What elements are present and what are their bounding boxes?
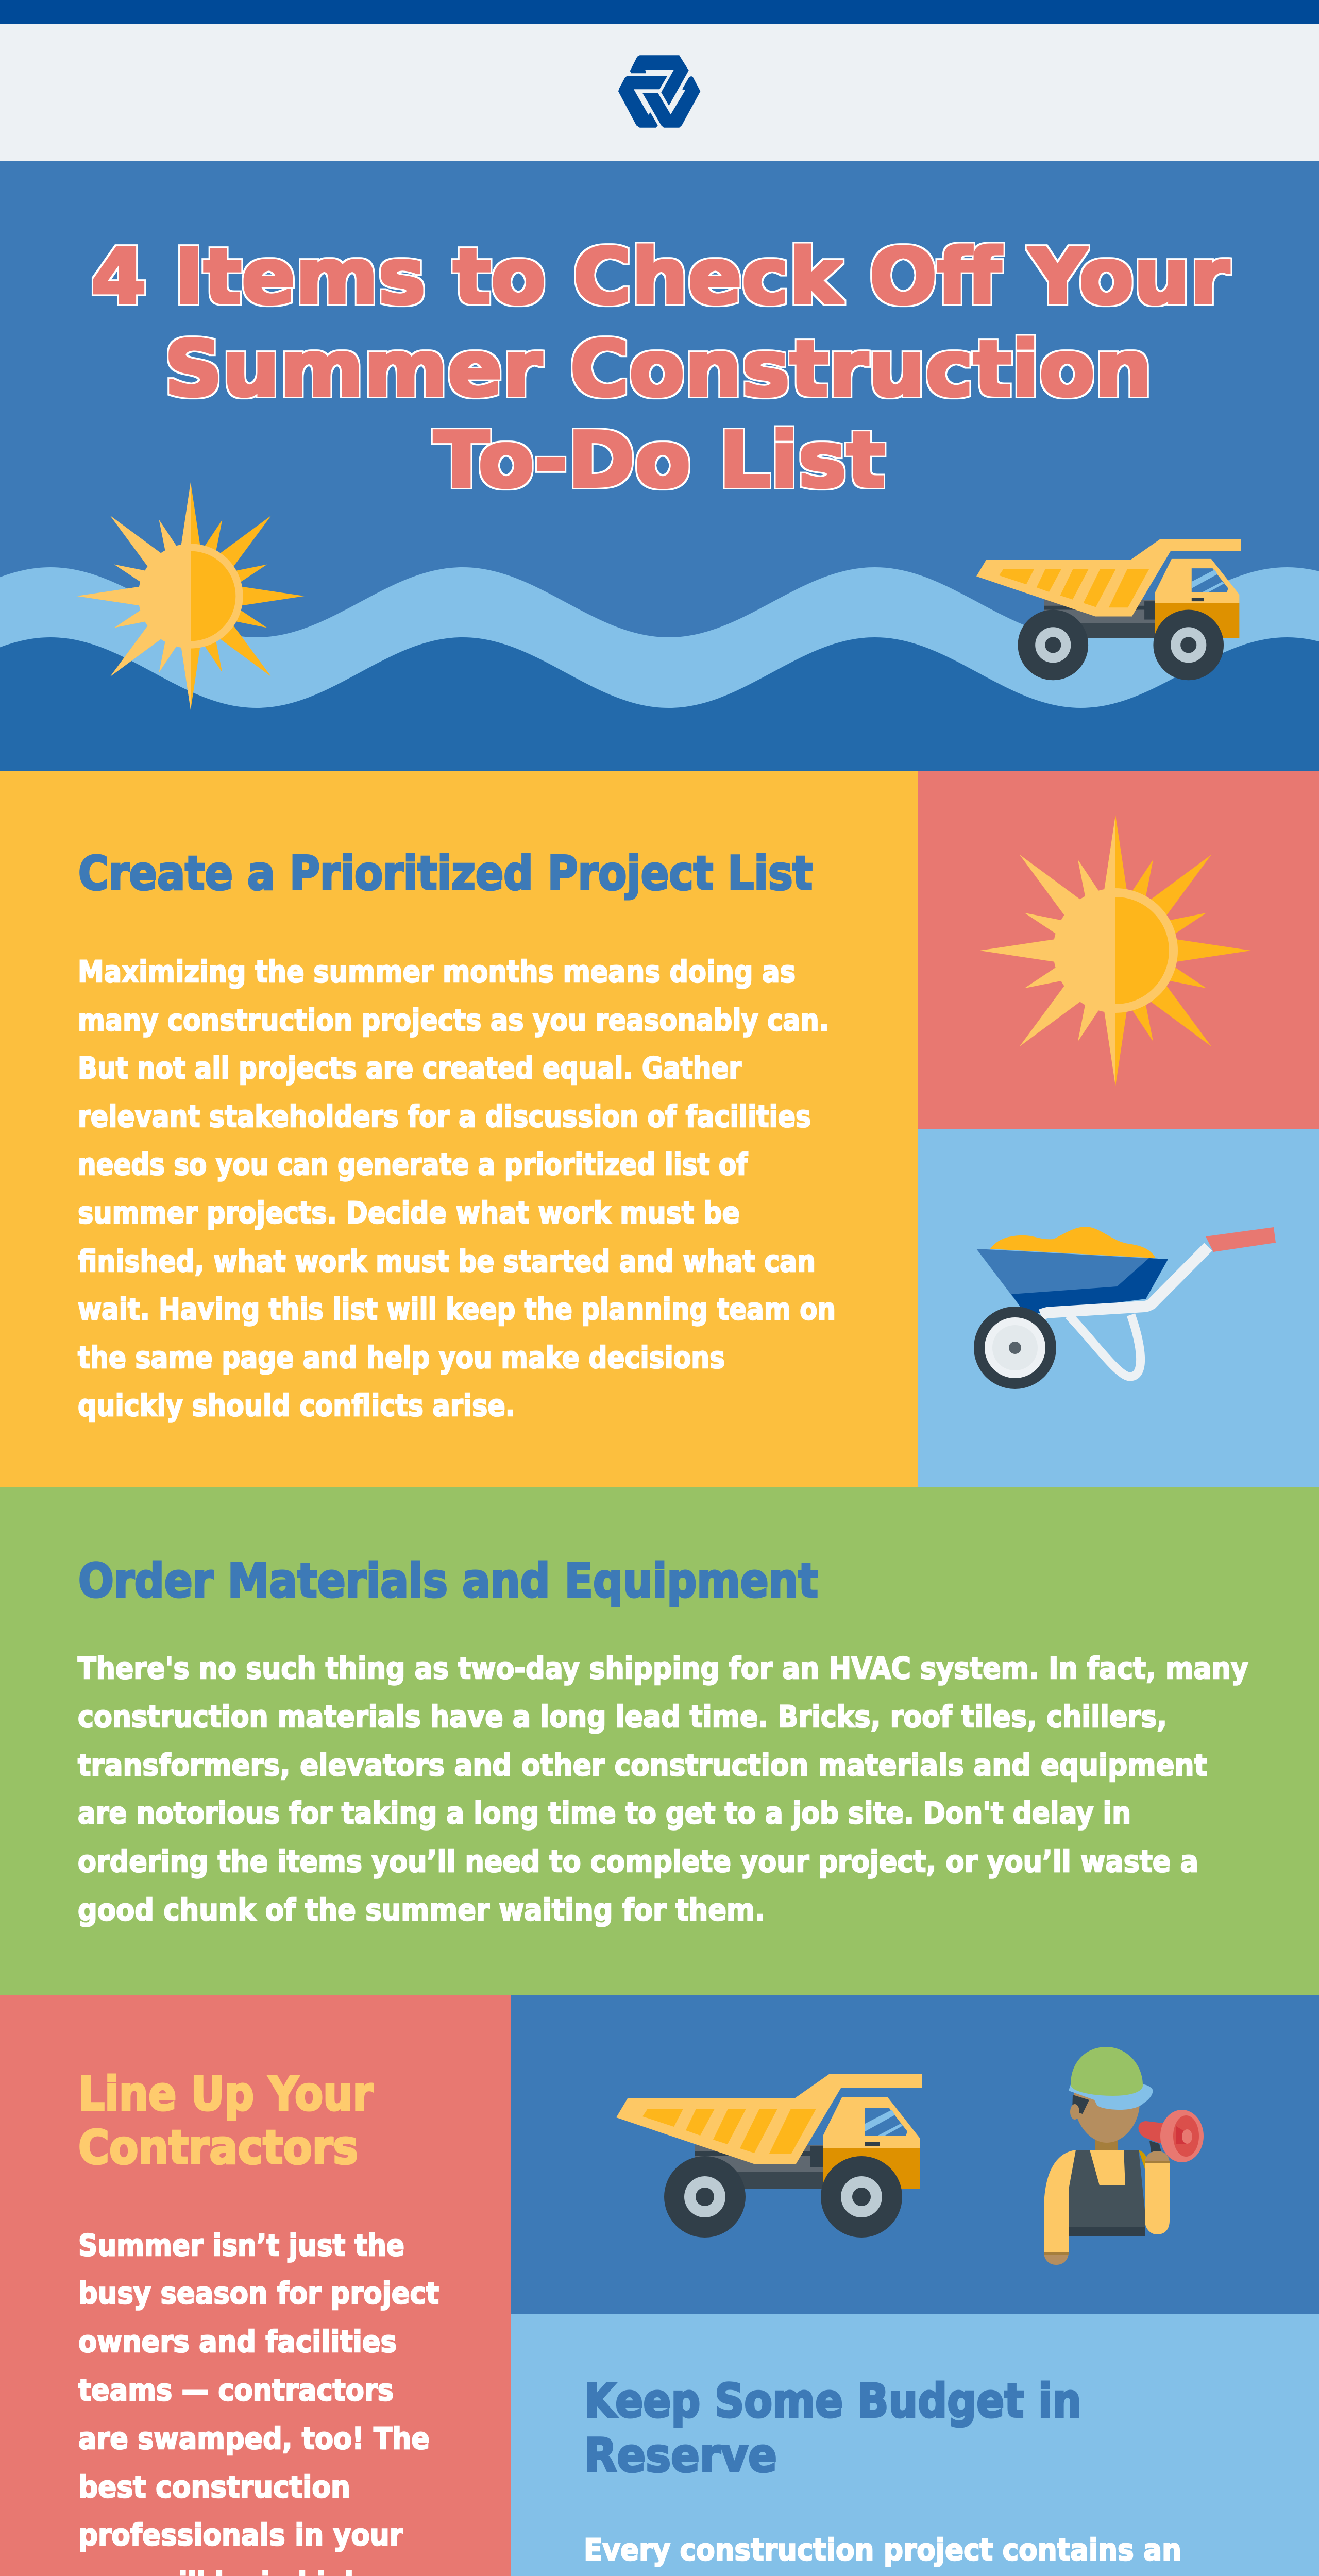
body text: Maximizing the summer months means doing as: [78, 954, 796, 989]
panel: sun tile: [918, 771, 1319, 1129]
icon: Gordian logo mark: [618, 55, 700, 128]
body text: quickly should conflicts arise.: [78, 1388, 515, 1423]
icon: sun: [77, 482, 305, 710]
body text: Summer isn’t just the: [78, 2228, 404, 2263]
body text: the same page and help you make decisions: [78, 1340, 725, 1375]
body text: [78, 2228, 439, 2576]
icon: wheelbarrow: [974, 1227, 1276, 1389]
heading: [78, 2067, 374, 2175]
body text: best construction: [78, 2469, 350, 2504]
body text: transformers, elevators and other construction materials and equipment: [78, 1748, 1207, 1783]
body text: [78, 1651, 1248, 1927]
body text: busy season for project: [78, 2276, 439, 2311]
panel: order materials and equipment: [0, 1487, 1319, 1995]
body text: construction materials have a long lead time. Bricks, roof tiles, chillers,: [78, 1699, 1167, 1734]
panel: wheelbarrow tile: [918, 1129, 1319, 1487]
body text: needs so you can generate a prioritized list of: [78, 1147, 748, 1182]
panel: line up your contractors: [0, 1995, 511, 2576]
panel: hero: [0, 161, 1319, 771]
body text: But not all projects are created equal. Gather: [78, 1050, 741, 1086]
icon: sun: [980, 815, 1251, 1086]
top colour bar: [0, 0, 1319, 24]
heading: Line Up Your: [78, 2067, 374, 2121]
body text: Every construction project contains an: [584, 2532, 1181, 2567]
title: Summer Construction: [164, 325, 1152, 413]
panel: truck and worker tile: [511, 1995, 1319, 2314]
heading: Contractors: [78, 2121, 358, 2175]
title: 4 Items to Check Off Your: [91, 232, 1229, 321]
body text: wait. Having this list will keep the planning team on: [78, 1292, 836, 1327]
body text: teams — contractors: [78, 2372, 394, 2408]
body text: summer projects. Decide what work must be: [78, 1195, 740, 1230]
icon: dump truck: [976, 539, 1241, 680]
body text: professionals in your: [78, 2517, 403, 2552]
heading: [584, 2374, 1081, 2483]
body text: [78, 954, 836, 1423]
heading: Create a Prioritized Project List: [78, 846, 813, 901]
title: To-Do List: [434, 416, 885, 504]
body text: good chunk of the summer waiting for them.: [78, 1892, 765, 1927]
heading: Order Materials and Equipment: [78, 1554, 818, 1608]
body text: many construction projects as you reasonably can.: [78, 1003, 829, 1038]
body text: finished, what work must be started and what can: [78, 1244, 816, 1279]
body text: are notorious for taking a long time to get to a job site. Don't delay in: [78, 1795, 1131, 1831]
heading: Keep Some Budget in: [584, 2374, 1081, 2428]
icon: worker with megaphone: [1044, 2047, 1204, 2265]
icon: dump truck: [616, 2074, 922, 2238]
header band: [0, 24, 1319, 161]
body text: ordering the items you’ll need to complete your project, or you’ll waste a: [78, 1844, 1198, 1879]
title: [91, 232, 1229, 504]
body text: owners and facilities: [78, 2324, 397, 2359]
heading: Reserve: [584, 2429, 777, 2483]
panel: keep some budget in reserve: [511, 2314, 1319, 2576]
waves: [0, 567, 1319, 771]
panel: create a prioritized project list: [0, 771, 918, 1487]
body text: are swamped, too! The: [78, 2421, 430, 2456]
body text: relevant stakeholders for a discussion of facilities: [78, 1099, 811, 1134]
